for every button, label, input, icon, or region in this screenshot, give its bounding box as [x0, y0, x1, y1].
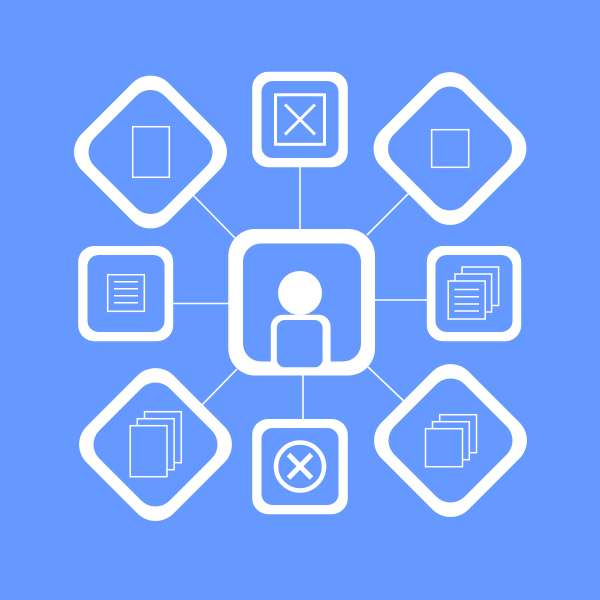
panel: bottom square with circled cross [252, 419, 348, 514]
panel: top right diamond with square [363, 62, 537, 235]
panel: top square with crossed box [252, 72, 348, 167]
panel: bottom left diamond with stacked pages [69, 358, 242, 531]
icon: circled cross [276, 442, 324, 490]
panel: right square with stacked text documents [427, 246, 521, 341]
icon: user head [278, 271, 322, 315]
icon: stacked squares [426, 415, 476, 467]
frame [228, 229, 375, 376]
icon: text document [108, 275, 144, 311]
panel: left square with text document [78, 246, 173, 341]
central user frame [228, 229, 375, 376]
icon: square page [432, 130, 469, 167]
icon: crossed box [276, 95, 324, 144]
panel: bottom right diamond with stacked squares [364, 354, 537, 527]
panel: top left diamond with page [64, 65, 237, 239]
icon: single page [133, 127, 169, 177]
icon: stacked pages [130, 412, 181, 477]
connector lines [172, 166, 428, 420]
icon: user body [271, 315, 331, 373]
icon: stacked text documents [448, 267, 499, 319]
